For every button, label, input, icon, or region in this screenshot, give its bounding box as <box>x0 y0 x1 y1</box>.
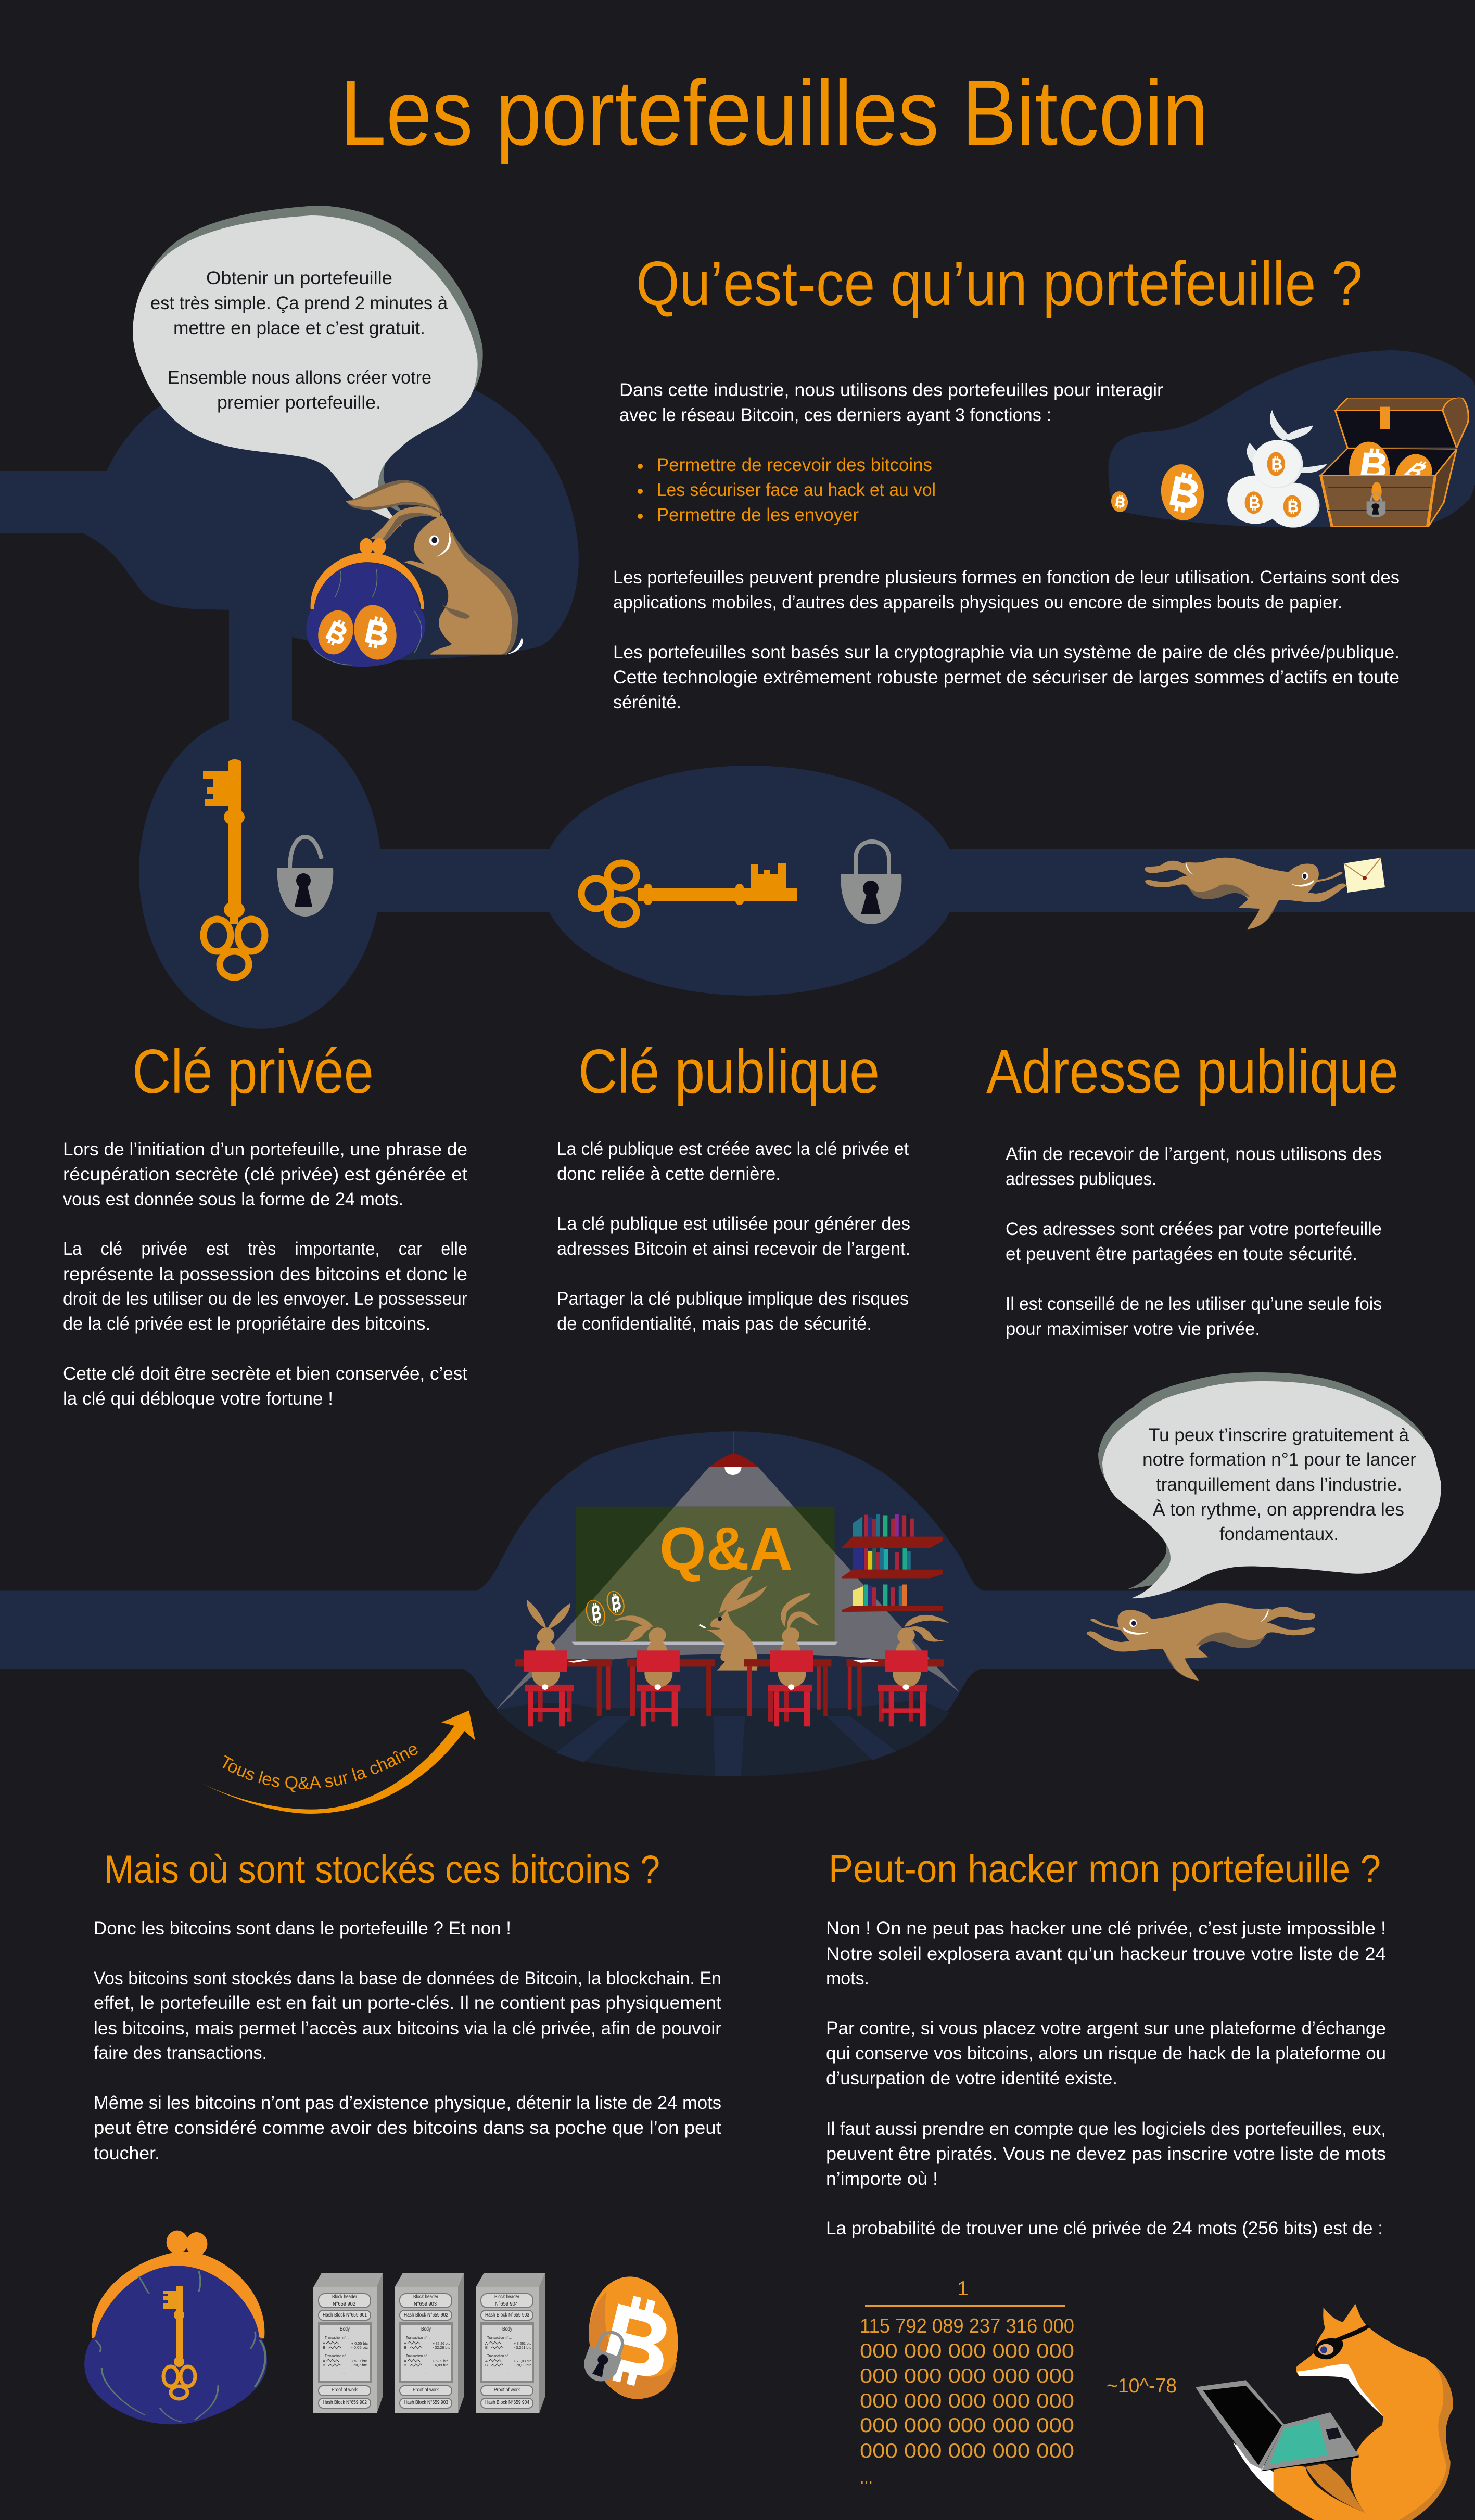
illustration: blockchain block 1: B <box>323 2345 325 2350</box>
illustration: blockchain block 1 <box>313 2273 383 2413</box>
desk 4 <box>847 1650 944 1726</box>
text block: piratage: d’usurpation de votre identité existe. <box>826 2068 1117 2089</box>
illustration: blockchain block 3: - 3,261 btc <box>514 2345 531 2350</box>
text block: clé privée: droit de les utiliser ou de les envoyer. Le possesseur <box>63 1289 467 1309</box>
text block: piratage <box>826 1918 1386 2238</box>
text block: stockage: toucher. <box>94 2143 160 2163</box>
text block: stockage: Vos bitcoins sont stockés dans la base de données de Bitcoin, la blockchain. En <box>94 1968 721 1989</box>
illustration: blockchain block 2: Hash Block N°659 902 <box>404 2312 448 2318</box>
text block: portefeuilles formes et cryptographie: sérénité. <box>613 692 681 712</box>
blob behind chest <box>1108 350 1475 527</box>
illustration: blockchain block 3: Hash Block N°659 903 <box>485 2312 529 2318</box>
illustration: blockchain block 2: Body <box>421 2326 431 2332</box>
classroom floor <box>496 1700 950 1776</box>
heading: adresse publique: Adresse publique <box>986 1037 1398 1106</box>
illustration: blockchain block 2: - 32,26 btc <box>433 2345 450 2350</box>
bookshelves <box>842 1514 943 1612</box>
illustration: blockchain block 2: Block header <box>413 2294 439 2300</box>
list: three functions: Permettre de les envoyer <box>657 505 859 525</box>
lamp <box>709 1431 758 1475</box>
chalkboard <box>571 1507 838 1645</box>
text block: intro: avec le réseau Bitcoin, ces derniers ayant 3 fonctions : <box>619 405 1051 425</box>
illustration: blockchain block 3: + 3,261 btc <box>514 2341 531 2346</box>
text block: stockage: faire des transactions. <box>94 2043 267 2063</box>
text block: piratage: Il faut aussi prendre en compte que les logiciels des portefeuilles, eux, <box>826 2119 1386 2139</box>
text block: piratage: La probabilité de trouver une clé privée de 24 mots (256 bits) est de : <box>826 2218 1383 2238</box>
illustration: blockchain block 1: Proof of work <box>332 2387 358 2393</box>
text block: clé privée: La clé privée est très importante, car elle <box>63 1239 467 1259</box>
text block: portefeuilles formes et cryptographie: Les portefeuilles sont basés sur la cryptographie via un système de paire de clés privée/publique. <box>613 642 1400 663</box>
heading: qu'est-ce qu'un portefeuille: Qu’est-ce qu’un portefeuille ? <box>636 249 1363 319</box>
text block: clé privée: représente la possession des bitcoins et donc le <box>63 1264 467 1284</box>
fraction: probability: 000 000 000 000 000 <box>860 2365 1074 2387</box>
text block: clé publique: donc reliée à cette dernière. <box>557 1164 781 1184</box>
padlock on chest <box>1367 482 1385 517</box>
fraction: probability: 000 000 000 000 000 <box>860 2414 1074 2437</box>
speech bubble: formation <box>1098 1372 1441 1598</box>
text block: stockage: Donc les bitcoins sont dans le portefeuille ? Et non ! <box>94 1918 511 1939</box>
illustration: blockchain block 2: Transaction n° ... <box>406 2335 430 2340</box>
icon: open padlock <box>277 837 333 917</box>
illustration: blockchain block 1: Hash Block N°659 901 <box>323 2312 367 2318</box>
list: three functions: Les sécuriser face au hack et au vol <box>657 480 936 500</box>
illustration: blockchain block 3: Proof of work <box>494 2387 520 2393</box>
illustration: blockchain block 3: Transaction n° ... <box>487 2335 512 2340</box>
illustration: blockchain block 2: A <box>404 2341 406 2346</box>
illustration: blockchain block 1: Transaction n° ... <box>325 2335 349 2340</box>
text block: adresse publique: Il est conseillé de ne les utiliser qu’une seule fois <box>1006 1294 1382 1314</box>
coins in chest <box>1349 442 1432 482</box>
text block: portefeuilles formes et cryptographie: applications mobiles, d’autres des appareils physiques ou encore de simples bouts de papier. <box>613 592 1342 613</box>
illustration: blockchain block 2: A <box>404 2359 406 2363</box>
text block: stockage: les bitcoins, mais permet l’accès aux bitcoins via la clé privée, afin de pouvoir <box>94 2018 721 2039</box>
illustration: blockchain block 3: ... <box>504 2370 508 2376</box>
callout text: Tous les Q&A sur la chaîne <box>223 1746 418 1792</box>
text block: adresse publique: pour maximiser votre vie privée. <box>1006 1319 1260 1339</box>
text block: adresse publique: Afin de recevoir de l’argent, nous utilisons des <box>1006 1144 1382 1164</box>
bag ties <box>1247 410 1327 473</box>
illustration: blockchain block 2: + 6,89 btc <box>433 2359 448 2363</box>
heading: hacker: Peut-on hacker mon portefeuille ? <box>829 1847 1381 1891</box>
illustration: blockchain block 3: B <box>485 2363 488 2368</box>
illustration: blockchain block 1: A <box>323 2359 325 2363</box>
heading: où sont stockés: Mais où sont stockés ces bitcoins ? <box>104 1848 660 1892</box>
illustration: blockchain block 2: B <box>404 2363 406 2368</box>
illustration: Q&A classroom <box>0 1431 1475 1776</box>
icon: bitcoin egg large <box>349 601 401 664</box>
list: three functions <box>638 455 936 525</box>
speech bubble: obtenir un portefeuille <box>133 206 483 527</box>
icon: padlock on egg <box>579 2326 629 2386</box>
illustration: hacker fox with laptop <box>1196 2304 1453 2520</box>
icon: small bitcoin <box>1110 490 1129 513</box>
student rabbit 1 <box>527 1599 570 1652</box>
text block: piratage: Notre soleil explosera avant qu’un hackeur trouve votre liste de 24 <box>826 1944 1386 1964</box>
illustration: blockchain block 1: Transaction n° ... <box>325 2353 349 2358</box>
illustration: blockchain block 1: ... <box>342 2370 346 2376</box>
text block: clé privée: récupération secrète (clé privée) est générée et <box>63 1164 467 1185</box>
speech bubble: obtenir un portefeuille: Ensemble nous allons créer votre <box>168 367 431 388</box>
speech bubble: obtenir un portefeuille: est très simple. Ça prend 2 minutes à <box>150 293 448 313</box>
illustration: blockchain block 3: + 78,03 btc <box>514 2359 531 2363</box>
speech bubble: obtenir un portefeuille: premier portefeuille. <box>217 392 381 413</box>
fraction: probability: 000 000 000 000 000 <box>860 2390 1074 2412</box>
illustration: running rabbit <box>1087 1603 1315 1681</box>
text block: adresse publique: adresses publiques. <box>1006 1169 1156 1189</box>
illustration: blockchain block 2 <box>395 2273 464 2413</box>
text block: portefeuilles formes et cryptographie: Cette technologie extrêmement robuste permet de sécuriser de larges sommes d’actifs en toute <box>613 667 1400 688</box>
icon: envelope <box>1344 858 1385 893</box>
rabbit <box>346 480 523 655</box>
student rabbit 2 <box>614 1615 667 1652</box>
illustration: blockchain block 1: A <box>323 2341 325 2346</box>
student rabbit 4 <box>896 1615 949 1652</box>
illustration: blockchain block 3: Body <box>502 2326 512 2332</box>
light cone <box>496 1467 960 1710</box>
illustration: blockchain block 1: Body <box>340 2326 350 2332</box>
text block: adresse publique: et peuvent être partagées en toute sécurité. <box>1006 1244 1357 1264</box>
illustration: blockchain block 2: Transaction n° ... <box>406 2353 430 2358</box>
illustration: blockchain block 1: - 0,05 btc <box>351 2345 368 2350</box>
text block: clé privée: vous est donnée sous la forme de 24 mots. <box>63 1189 403 1210</box>
illustration: blockchain block 1: B <box>323 2363 325 2368</box>
board text: Q&A: Q&A <box>659 1514 793 1583</box>
illustration: blockchain block 2: B <box>404 2345 406 2350</box>
illustration: blockchain block 1: Hash Block N°659 902 <box>323 2400 367 2406</box>
lid <box>1336 398 1468 448</box>
icon: vertical key <box>203 759 265 977</box>
speech bubble: formation: tranquillement dans l’industrie. <box>1156 1474 1402 1495</box>
fox body <box>1233 2304 1453 2520</box>
text block: clé publique: La clé publique est utilisée pour générer des <box>557 1214 910 1234</box>
coins on the board <box>584 1590 626 1627</box>
title: Les portefeuilles Bitcoin <box>340 61 1209 164</box>
illustration: blockchain block 3: Hash Block N°659 904 <box>485 2400 529 2406</box>
fraction: probability: 115 792 089 237 316 000 <box>860 2315 1074 2337</box>
background path: keys band <box>139 715 1475 1029</box>
illustration: blockchain block 3 <box>476 2273 545 2413</box>
fraction: probability: 000 000 000 000 000 <box>860 2440 1074 2462</box>
text block: stockage: Même si les bitcoins n’ont pas d’existence physique, détenir la liste de 24 mots <box>94 2093 721 2113</box>
illustration: blockchain block 3: Block header <box>494 2294 520 2300</box>
heading: clé privée: Clé privée <box>132 1037 374 1106</box>
illustration: blockchain block 1: + 50,7 btc <box>351 2359 367 2363</box>
purse <box>306 538 425 667</box>
illustration: blockchain block 3: - 78,03 btc <box>514 2363 531 2368</box>
arrow: Q&A callout <box>199 1710 475 1814</box>
illustration: blockchain block 2: Proof of work <box>413 2387 439 2393</box>
fraction: probability: ... <box>860 2466 873 2488</box>
icon: large bitcoin <box>1159 462 1206 523</box>
text block: stockage: peut être considéré comme avoir des bitcoins dans sa poche que l’on peut <box>94 2118 721 2138</box>
illustration: rabbit and purse <box>306 480 523 667</box>
text block: piratage: n’importe où ! <box>826 2169 938 2189</box>
text block: intro: Dans cette industrie, nous utilisons des portefeuilles pour interagir <box>619 380 1163 400</box>
illustration: blockchain block 2: - 6,89 btc <box>433 2363 448 2368</box>
white coin bags <box>1227 440 1319 528</box>
desk 1 <box>515 1650 612 1726</box>
fraction: probability: 000 000 000 000 000 <box>860 2340 1074 2362</box>
illustration: treasure chest and coins <box>1108 350 1475 528</box>
speech bubble: formation: fondamentaux. <box>1219 1524 1339 1544</box>
icon: horizontal key <box>581 863 797 925</box>
text block: clé privée: la clé qui débloque votre fortune ! <box>63 1389 333 1409</box>
text block: stockage <box>94 1918 721 2163</box>
desk 3 <box>744 1650 831 1726</box>
text block: clé publique <box>557 1139 910 1334</box>
heading: clé publique: Clé publique <box>578 1037 880 1106</box>
illustration: blockchain block 3: N°659 904 <box>495 2301 518 2307</box>
text block: clé publique: de confidentialité, mais pas de sécurité. <box>557 1314 872 1334</box>
speech bubble: obtenir un portefeuille: Obtenir un portefeuille <box>206 268 392 288</box>
illustration: blockchain block 2: ... <box>423 2370 427 2376</box>
illustration: blockchain block 1: Block header <box>332 2294 358 2300</box>
chest interior <box>1321 448 1457 475</box>
fraction: probability <box>860 2277 1074 2488</box>
illustration: locked bitcoin egg <box>579 2272 685 2404</box>
list: three functions: Permettre de recevoir des bitcoins <box>657 455 932 475</box>
text block: portefeuilles formes et cryptographie <box>613 567 1400 712</box>
text block: portefeuilles formes et cryptographie: Les portefeuilles peuvent prendre plusieurs formes en fonction de leur utilisation. Certains sont des <box>613 567 1400 588</box>
illustration: blockchain block 2: + 32,26 btc <box>433 2341 450 2346</box>
text block: clé privée <box>63 1139 467 1409</box>
result: approximate probability: ~10^-78 <box>1107 2375 1177 2397</box>
illustration: blockchain block 1: N°659 902 <box>333 2301 355 2307</box>
icon: bitcoin egg small <box>313 606 358 658</box>
laptop <box>1196 2380 1359 2471</box>
background path: top blob and stem <box>0 364 579 729</box>
illustration: purse with key <box>84 2231 267 2424</box>
icon: closed padlock <box>841 842 901 924</box>
text block: piratage: mots. <box>826 1968 869 1989</box>
text block: stockage: effet, le portefeuille est en fait un porte-clés. Il ne contient pas physiquement <box>94 1993 721 2013</box>
student rabbit 3 <box>781 1593 819 1652</box>
text block: intro <box>619 380 1163 425</box>
text block: piratage: Par contre, si vous placez votre argent sur une plateforme d’échange <box>826 2018 1386 2039</box>
text block: clé privée: Cette clé doit être secrète et bien conservée, c’est <box>63 1364 467 1384</box>
text block: clé publique: Partager la clé publique implique des risques <box>557 1289 909 1309</box>
text block: clé publique: La clé publique est créée avec la clé privée et <box>557 1139 909 1159</box>
illustration: blockchain block 3: A <box>485 2341 488 2346</box>
illustration: running rabbit with envelope <box>1145 858 1385 929</box>
desk 2 <box>627 1650 715 1726</box>
text block: piratage: Non ! On ne peut pas hacker une clé privée, c’est juste impossible ! <box>826 1918 1386 1939</box>
fraction: probability: 1 <box>957 2277 969 2300</box>
icon: key inside purse <box>163 2286 195 2399</box>
speech bubble: formation: À ton rythme, on apprendra les <box>1153 1499 1404 1520</box>
speech bubble: formation: notre formation n°1 pour te lancer <box>1142 1449 1416 1470</box>
speech bubble: obtenir un portefeuille: mettre en place et c’est gratuit. <box>173 318 425 338</box>
text block: adresse publique <box>1006 1144 1382 1339</box>
illustration: blockchain block 2: Hash Block N°659 903 <box>404 2400 448 2406</box>
illustration: blockchain block 3: Transaction n° ... <box>487 2353 512 2358</box>
illustration: blockchain block 2: N°659 903 <box>414 2301 437 2307</box>
text block: clé privée: Lors de l’initiation d’un portefeuille, une phrase de <box>63 1139 467 1160</box>
chest base <box>1321 449 1457 526</box>
text block: piratage: peuvent être piratés. Vous ne devez pas inscrire votre liste de mots <box>826 2144 1386 2164</box>
teacher rabbit <box>698 1576 767 1671</box>
text block: clé privée: de la clé privée est le propriétaire des bitcoins. <box>63 1314 430 1334</box>
illustration: blockchain block 3: A <box>485 2359 488 2363</box>
illustration: blockchain block 3: B <box>485 2345 488 2350</box>
illustration: blockchain block 1: + 0,05 btc <box>351 2341 368 2346</box>
background path: classroom blob and band <box>0 1431 1475 1776</box>
speech bubble: formation: Tu peux t’inscrire gratuitement à <box>1149 1425 1409 1445</box>
text block: piratage: qui conserve vos bitcoins, alors un risque de hack de la plateforme ou <box>826 2043 1386 2064</box>
text block: clé publique: adresses Bitcoin et ainsi recevoir de l’argent. <box>557 1239 910 1259</box>
illustration: blockchain block 1: - 50,7 btc <box>351 2363 367 2368</box>
text block: adresse publique: Ces adresses sont créées par votre portefeuille <box>1006 1219 1382 1239</box>
